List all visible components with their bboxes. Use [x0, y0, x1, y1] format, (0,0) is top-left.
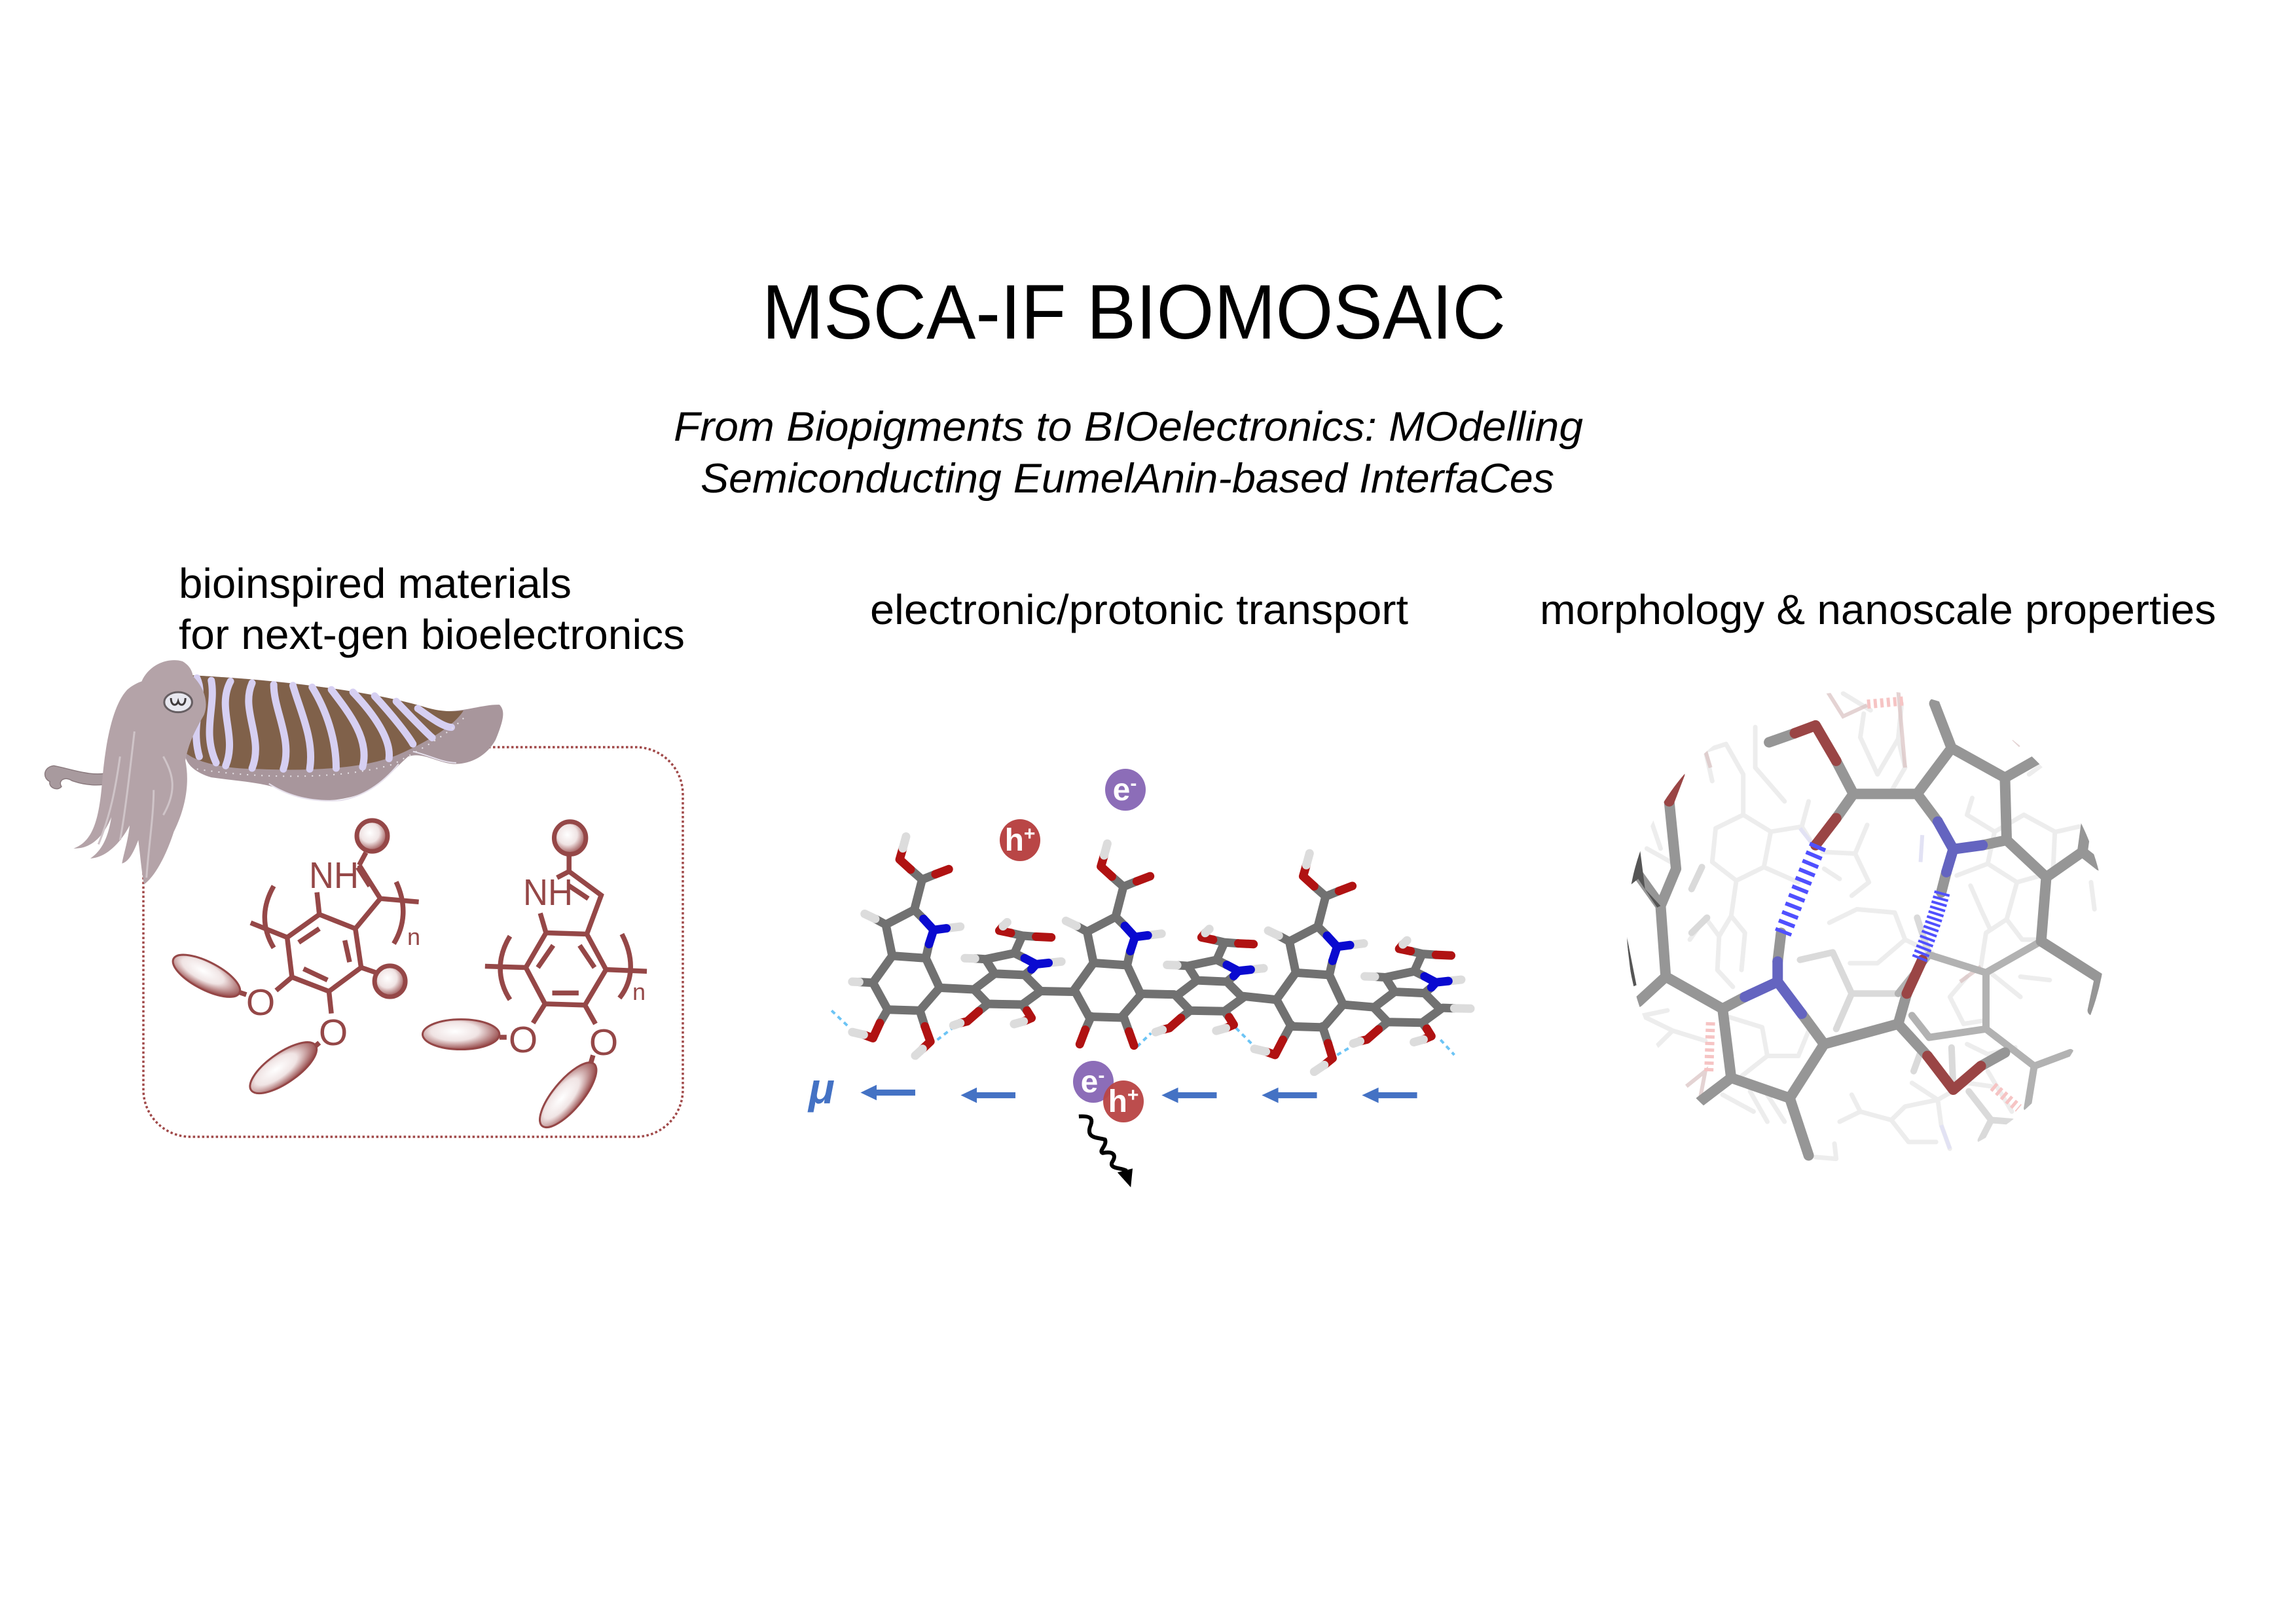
charge: hole top: +: [1024, 823, 1035, 845]
molecule: right polymer: [422, 822, 647, 1134]
atom labels: O: [319, 1012, 348, 1054]
terminal stubs: [852, 982, 1470, 1008]
charge: hole top: [1000, 819, 1040, 861]
left polymer bonds: [240, 853, 419, 1049]
monomer unit 1: [865, 837, 960, 1010]
atom labels: [246, 855, 646, 1063]
heading: bioinspired materials: [179, 560, 685, 658]
panel: polymer box: [143, 747, 683, 1137]
charge: hole top: h: [1005, 823, 1024, 858]
subtitle: [674, 404, 1583, 502]
cuttlefish head and arms: [73, 660, 206, 885]
cuttlefish eye: [164, 692, 192, 712]
back layer pale bonds: [1692, 867, 2012, 1140]
monomer unit 3: [1066, 843, 1161, 1018]
chart: eumelanin stick molecule: [831, 837, 1470, 1187]
lavender stripe pattern: [196, 678, 451, 769]
bottom substituents gray: [880, 1010, 1328, 1043]
molecule: left polymer: [166, 821, 419, 1101]
cuttlefish stripes: [185, 675, 464, 769]
heading: bioinspired materials: for next-gen bioelectronics: [179, 611, 685, 658]
atom labels: NH: [309, 855, 359, 896]
charge: electron-hole pair: -: [1098, 1065, 1104, 1086]
hydrogen bond dashed right: [1919, 893, 1942, 961]
atom labels: n: [407, 923, 420, 950]
cuttlefish arm shading: [98, 731, 172, 877]
atom labels: n: [632, 978, 646, 1005]
hydrogen bond dashed left: [1783, 845, 1818, 934]
monomer unit 5: [1268, 853, 1364, 1027]
bottom substituents oxygen: [864, 1023, 1332, 1065]
monomer unit 4: [1156, 929, 1264, 1032]
heading: electronic/protonic transport: electronic/protonic transport: [870, 586, 1408, 633]
charge: electron top: e: [1113, 773, 1130, 807]
charge: electron-hole pair: +: [1127, 1084, 1139, 1106]
atom labels: O: [246, 982, 275, 1024]
right polymer end groups: [422, 822, 606, 1134]
back layer light bonds: [1898, 941, 2070, 1108]
dark edge wedges: [1626, 849, 1660, 987]
faint hydrogen bonds: [1709, 701, 2018, 1108]
icon: cuttlefish: [45, 660, 503, 885]
charge: electron-hole pair: e: [1081, 1065, 1098, 1099]
subtitle: From Biopigments to BIOelectronics: MOdelling: [674, 404, 1583, 450]
wavy photon arrow: [1079, 1116, 1133, 1187]
cuttlefish tentacle: [45, 766, 111, 789]
charge: electron-hole pair: h: [1108, 1084, 1127, 1119]
charge: electron top: -: [1130, 773, 1137, 794]
foreground top molecule: [1637, 703, 2100, 1155]
foreground oxygen bonds: [1669, 726, 1981, 1090]
title: MSCA-IF BIOMOSAIC: [762, 269, 1506, 356]
foreground nitrogen bonds: [1745, 822, 1982, 1014]
mobility label: μ: [807, 1064, 835, 1113]
right polymer bonds: [485, 855, 647, 1063]
faint coloured bonds: [1686, 690, 2020, 1098]
atom labels: O: [509, 1019, 538, 1061]
bottom substituents hydrogen: [852, 1032, 1324, 1072]
charge: electron-hole pair: [1073, 1061, 1144, 1122]
mobility arrows: [860, 1085, 1417, 1103]
cuttlefish fin rim: [269, 752, 456, 801]
atom labels: O: [589, 1022, 618, 1063]
monomer unit 2: [953, 922, 1061, 1025]
subtitle: Semiconducting EumelAnin-based InterfaCes: [701, 456, 1554, 502]
faint blue atoms: [1800, 828, 1950, 1149]
chart: nanoscale morphology view: [1626, 690, 2100, 1159]
backbone links: [859, 982, 1454, 1008]
heading: morphology and nanoscale properties: morphology & nanoscale properties: [1540, 586, 2216, 633]
hydrogen bonds: [831, 1010, 1454, 1055]
atom labels: NH: [523, 872, 573, 913]
fin dots: [197, 717, 465, 776]
heading: bioinspired materials: bioinspired materials: [179, 560, 572, 607]
cuttlefish fin: [185, 675, 503, 800]
chemical structures: [166, 821, 647, 1134]
faint background network: [1643, 693, 2094, 1159]
left polymer end groups: [166, 821, 405, 1101]
charge: electron top: [1105, 769, 1146, 811]
monomer unit 6: [1353, 940, 1461, 1044]
